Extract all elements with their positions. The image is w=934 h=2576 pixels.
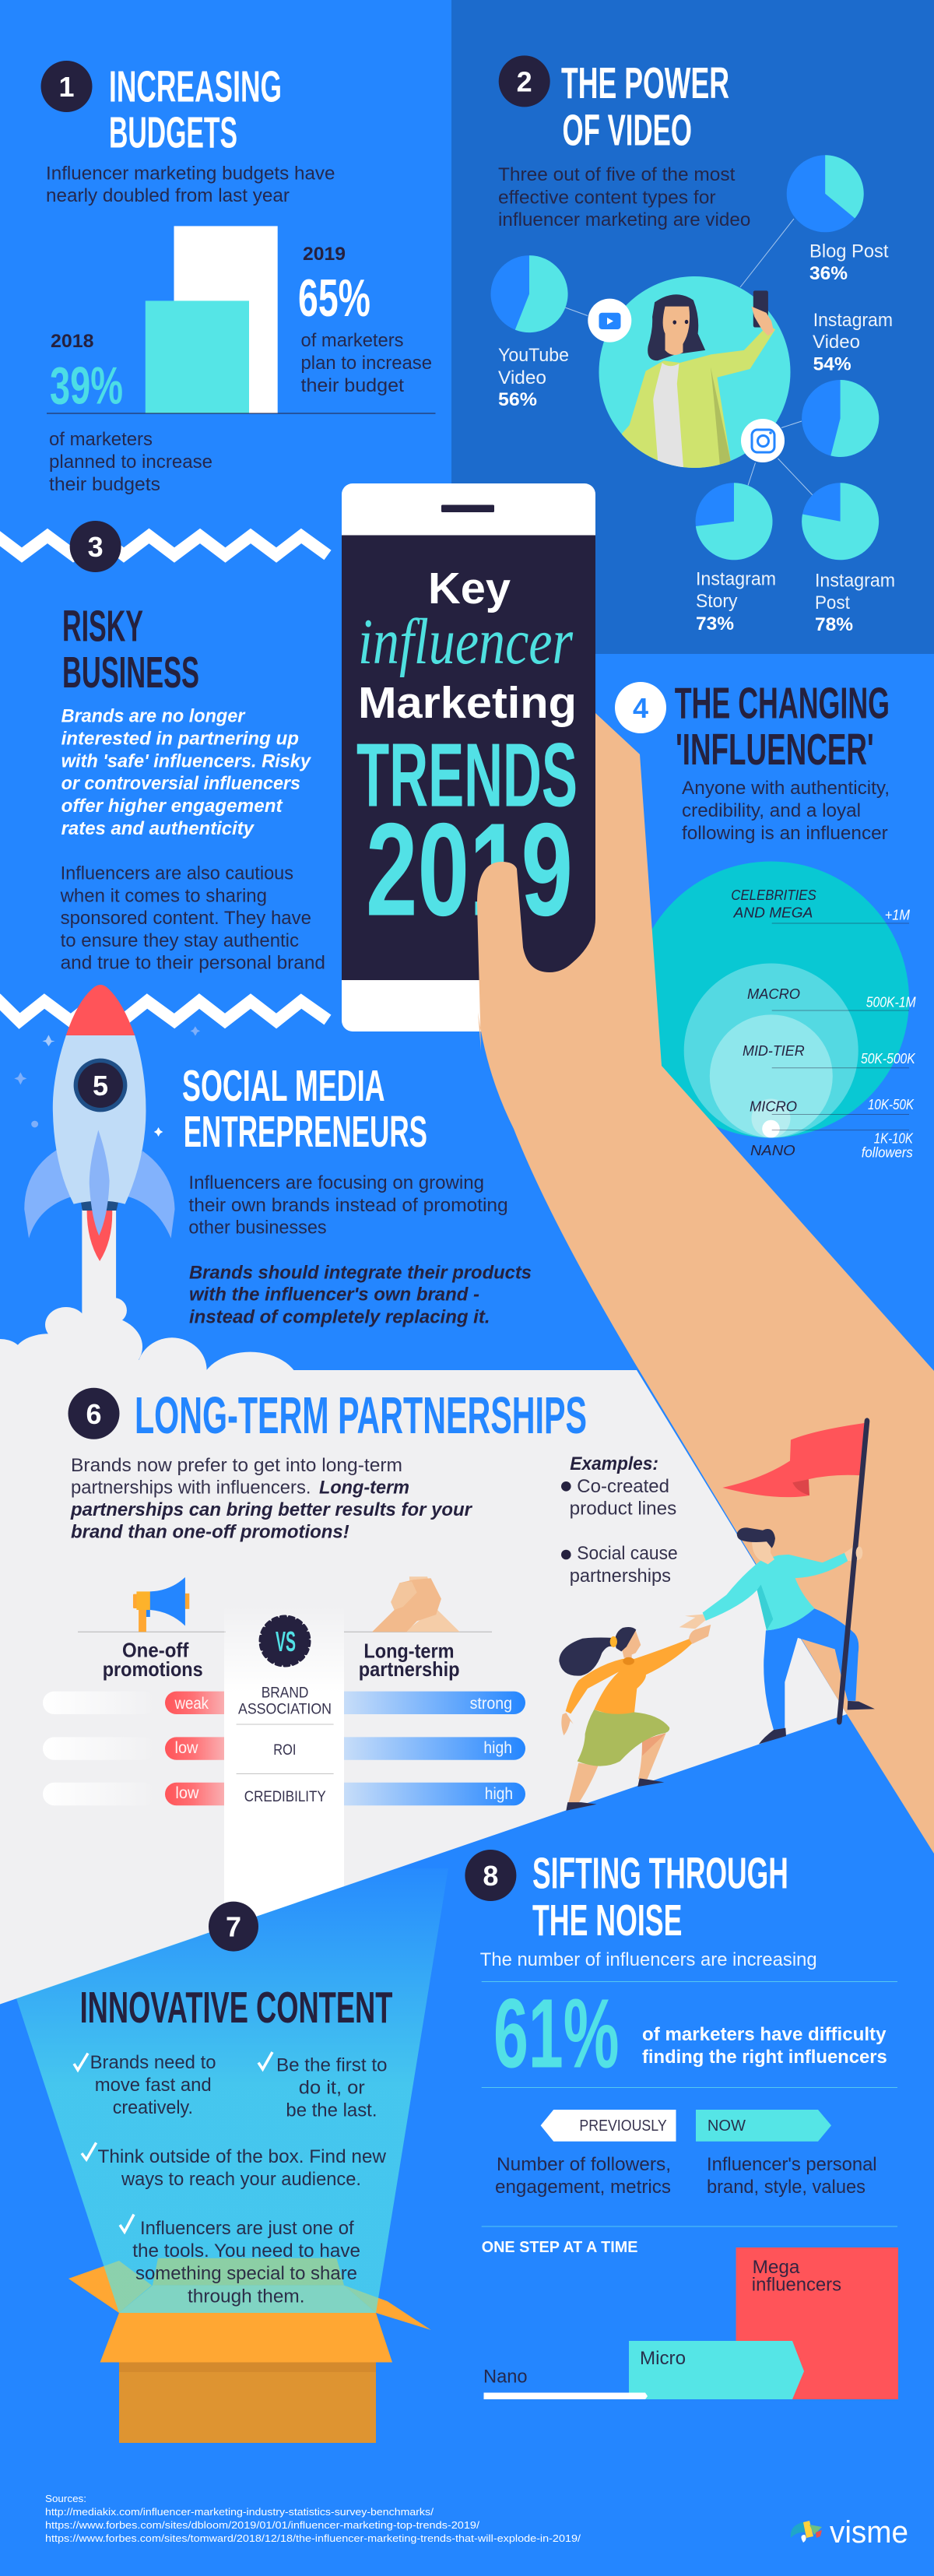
sources	[45, 2493, 581, 2544]
follower ranges: 500K-1M	[866, 995, 916, 1010]
intro text 4: credibility, and a loyal	[682, 800, 861, 821]
badge 7	[209, 1902, 258, 1952]
arrow: previously	[541, 2110, 676, 2142]
tip: be the first: be the last.	[286, 2100, 377, 2121]
intro text 8: The number of influencers are increasing	[480, 1949, 817, 1970]
illustration: climbers and flag	[559, 1422, 875, 1811]
panel: section 5 social media entrepreneurs	[74, 1059, 532, 1327]
intro text 2	[498, 164, 750, 230]
intro text 4	[682, 778, 890, 844]
stat 2019: 2019	[303, 244, 346, 265]
stat 61%: 61%	[493, 1979, 619, 2089]
panel: section 4 the changing influencer	[615, 679, 916, 1160]
arrow: now: NOW	[708, 2117, 746, 2135]
label: instagram story	[696, 568, 776, 634]
hand holding the phone	[477, 713, 934, 1857]
label: instagram post: 78%	[815, 614, 853, 635]
step chart: Mega	[753, 2257, 800, 2278]
box front	[100, 2313, 392, 2443]
body text 3	[60, 863, 325, 973]
text: current metrics	[707, 2154, 877, 2198]
tier names: CELEBRITIES	[731, 887, 816, 903]
intro text 2: influencer marketing are video	[498, 209, 750, 230]
panel: power of video dark background	[451, 0, 934, 654]
comparison bars left: weak	[174, 1695, 209, 1713]
heading 3	[62, 601, 199, 698]
column headings: One-off	[122, 1639, 189, 1662]
body text 5: Influencers are focusing on growing	[188, 1172, 484, 1193]
examples list: product lines	[570, 1498, 676, 1519]
tip: move fast: move fast and	[95, 2075, 212, 2096]
label: instagram video: Video	[813, 332, 860, 353]
tip: think outside the box	[98, 2146, 387, 2190]
badge 1	[40, 61, 92, 112]
pie: instagram story 73%	[696, 483, 773, 560]
stat 2019: plan to increase	[300, 353, 432, 374]
intro text 1: Influencer marketing budgets have	[46, 163, 335, 185]
step chart	[483, 2247, 898, 2399]
zigzag top	[0, 536, 328, 555]
badge 7: 7	[226, 1910, 241, 1943]
tip: be the first: Be the first to	[276, 2054, 388, 2075]
follower ranges: followers	[862, 1144, 913, 1160]
highlighted text 3: or controversial influencers	[61, 773, 300, 794]
step chart: influencers	[752, 2275, 841, 2296]
step chart: Nano	[483, 2366, 528, 2387]
pie: instagram post 78%	[802, 483, 879, 560]
sources: https://www.forbes.com/sites/dbloom/2019/01/01/influencer-marketing-top-trends-2019/	[45, 2519, 479, 2531]
tier leader lines	[772, 923, 909, 1130]
phone	[342, 483, 595, 1031]
body text 3: sponsored content. They have	[61, 908, 311, 929]
examples list: partnerships	[570, 1566, 671, 1587]
logo: visme: visme	[830, 2515, 908, 2550]
column headings: promotions	[103, 1657, 203, 1681]
badge 3	[70, 521, 121, 572]
panel: section 7 innovative content	[74, 1902, 393, 2307]
heading 3: RISKY	[62, 601, 143, 651]
centre column	[224, 1605, 344, 1928]
icon: flag	[722, 1423, 865, 1497]
badge 5	[74, 1059, 127, 1112]
step chart heading: ONE STEP AT A TIME	[482, 2239, 638, 2256]
title	[356, 564, 578, 944]
stat 2018: planned to increase	[49, 452, 212, 473]
body text 3: Influencers are also cautious	[61, 863, 293, 884]
badge 4	[615, 682, 666, 733]
highlighted text 3: offer higher engagement	[61, 796, 283, 817]
connector lines	[565, 219, 813, 495]
label: instagram post: Instagram	[815, 571, 895, 592]
highlighted text 3: Brands are no longer	[61, 706, 246, 727]
follower ranges: 1K-10K	[874, 1131, 914, 1147]
badge 6: 6	[86, 1398, 102, 1430]
title: Key	[428, 564, 511, 613]
stat 2019: their budget	[300, 375, 404, 396]
bar chart budgets	[47, 226, 436, 414]
comparison bars right	[327, 1692, 525, 1805]
heading 5	[182, 1061, 427, 1157]
heading 3: BUSINESS	[62, 648, 199, 698]
tip: influencers are tools: through them.	[188, 2286, 305, 2307]
intro text 6: partnerships can bring better results for your	[70, 1499, 473, 1520]
stat 2019	[298, 244, 432, 396]
sources: https://www.forbes.com/sites/tomward/2018/12/18/the-influencer-marketing-trends-that-will-explode-in-2019/	[45, 2532, 581, 2544]
title: TRENDS	[356, 724, 578, 825]
highlighted text 3: with 'safe' influencers. Risky	[61, 750, 312, 772]
examples list: Social cause	[577, 1543, 678, 1564]
text: previous metrics: Number of followers,	[497, 2154, 671, 2175]
highlighted text 5: with the influencer's own brand -	[189, 1284, 479, 1306]
light beam from the box	[16, 1868, 448, 2313]
badge 2: 2	[517, 65, 532, 98]
badge 8	[465, 1850, 516, 1901]
tier names: MID-TIER	[743, 1043, 805, 1059]
tip: be the first	[276, 2054, 388, 2121]
title: 2019	[366, 796, 573, 944]
heading 2: THE POWER	[561, 58, 729, 108]
zigzag bottom	[0, 998, 328, 1021]
label: instagram post: Post	[815, 592, 850, 613]
label: instagram video	[813, 310, 893, 375]
label: blog post: 36%	[809, 263, 848, 284]
icon: youtube badge	[588, 299, 631, 343]
heading 6: LONG-TERM PARTNERSHIPS	[135, 1386, 587, 1445]
tip: influencers are tools: something special to share	[135, 2263, 357, 2284]
comparison bars left	[43, 1692, 243, 1805]
criteria labels: ASSOCIATION	[238, 1702, 332, 1718]
panel: influencer tier circles	[633, 861, 909, 1138]
badge 2	[499, 55, 550, 107]
highlighted text 5: Brands should integrate their products	[189, 1262, 532, 1283]
panel: long-term partnerships grey background	[0, 1370, 934, 2024]
text: previous metrics	[495, 2154, 671, 2198]
icon: megaphone	[133, 1577, 189, 1632]
intro text 6: brand than one-off promotions!	[71, 1521, 349, 1543]
highlighted text 5	[189, 1262, 532, 1327]
body text 3: and true to their personal brand	[61, 952, 325, 973]
label: youtube video: Video	[498, 367, 546, 388]
intro text 6: Brands now prefer to get into long-term	[71, 1455, 402, 1476]
body text 5: other businesses	[188, 1217, 327, 1238]
heading 1: INCREASING	[109, 62, 282, 112]
badge 4: 4	[633, 692, 648, 724]
body text 5: their own brands instead of promoting	[188, 1195, 508, 1216]
intro text 2: Three out of five of the most	[498, 164, 736, 185]
tip: move fast	[90, 2052, 216, 2118]
comparison bars right: strong	[470, 1695, 512, 1713]
illustration: open box	[68, 2258, 431, 2330]
label: instagram video: 54%	[813, 354, 851, 375]
tip: influencers are tools: the tools. You need to have	[132, 2240, 360, 2261]
intro text 6: Long-term	[319, 1477, 409, 1498]
examples list	[561, 1453, 678, 1587]
man	[679, 1422, 875, 1744]
title: influencer	[358, 606, 573, 678]
body text 3: when it comes to sharing	[60, 886, 267, 907]
heading 1	[109, 62, 282, 157]
stat 2018: 39%	[50, 357, 123, 416]
heading 8	[532, 1848, 788, 1945]
label: instagram story: 73%	[696, 613, 734, 634]
label: youtube video	[498, 345, 569, 410]
panel: section 6 long-term partnerships	[43, 1386, 678, 1928]
highlighted text 3: interested in partnering up	[61, 729, 299, 749]
icon: vs seal	[260, 1616, 310, 1666]
illustration: woman taking a selfie	[599, 276, 791, 468]
label: instagram post	[815, 571, 895, 635]
stat 2018: their budgets	[49, 474, 160, 495]
tier names: MACRO	[747, 986, 800, 1002]
intro text 1	[46, 163, 335, 206]
label: blog post	[809, 241, 889, 284]
highlighted text 3: rates and authenticity	[61, 818, 255, 839]
stat 61%	[493, 1979, 887, 2089]
tip: move fast: creatively.	[113, 2097, 193, 2118]
examples list: Examples:	[570, 1453, 658, 1474]
stat 2019: 65%	[298, 269, 370, 328]
label: blog post: Blog Post	[809, 241, 889, 262]
intro text 1: nearly doubled from last year	[46, 185, 290, 206]
label: instagram story: Instagram	[696, 568, 776, 590]
heading 8: SIFTING THROUGH	[532, 1848, 788, 1898]
icon: clasped hands	[372, 1576, 460, 1632]
text: current metrics: Influencer's personal	[707, 2154, 877, 2175]
badge 1: 1	[58, 71, 75, 103]
pie: instagram video 54%	[802, 380, 879, 457]
highlighted text 5: instead of completely replacing it.	[189, 1306, 490, 1327]
heading 4	[675, 679, 890, 775]
label: instagram story: Story	[696, 591, 738, 612]
tip: move fast: Brands need to	[90, 2052, 216, 2073]
intro text 4: Anyone with authenticity,	[682, 778, 890, 799]
tier names: MICRO	[750, 1099, 797, 1115]
follower ranges: 50K-500K	[861, 1051, 916, 1067]
tip: think outside the box: Think outside of the box. Find new	[98, 2146, 387, 2167]
blue lower background	[0, 1714, 934, 2576]
heading 2: OF VIDEO	[562, 105, 692, 155]
intro text 2: effective content types for	[498, 187, 716, 208]
icon: instagram badge	[741, 419, 785, 462]
tier names: AND MEGA	[733, 905, 813, 920]
heading 5: SOCIAL MEDIA	[182, 1061, 385, 1111]
tier names	[731, 887, 816, 1158]
tip: think outside the box: ways to reach your audience.	[121, 2169, 361, 2190]
pie: youtube video 56%	[490, 255, 568, 332]
intro text 6: partnerships with influencers.	[71, 1477, 311, 1498]
stat 2018: of marketers	[49, 429, 153, 450]
pie: blog post 36%	[787, 155, 864, 232]
logo: visme	[791, 2515, 908, 2550]
badge 6	[68, 1388, 120, 1439]
label: instagram video: Instagram	[813, 310, 893, 331]
badge 5: 5	[93, 1070, 108, 1102]
comparison bars left: low	[175, 1784, 199, 1802]
stat 2018	[49, 331, 212, 495]
sources: Sources:	[45, 2493, 86, 2504]
arrow: previously: PREVIOUSLY	[579, 2117, 667, 2135]
body text 5	[188, 1172, 508, 1238]
criteria labels: ROI	[273, 1742, 296, 1759]
criteria labels	[237, 1685, 334, 1805]
tip: influencers are tools: Influencers are just one of	[140, 2218, 354, 2239]
sources: http://mediakix.com/influencer-marketing-industry-statistics-survey-benchmarks/	[45, 2506, 434, 2518]
step chart: Micro	[640, 2348, 686, 2369]
panel: section 8 sifting through the noise	[465, 1848, 898, 2399]
text: current metrics: brand, style, values	[707, 2177, 866, 2198]
heading 5: ENTREPRENEURS	[184, 1107, 427, 1157]
dividers	[482, 1981, 897, 2226]
tip: be the first: do it, or	[299, 2077, 365, 2098]
column headings: partnership	[359, 1657, 460, 1681]
intro text 6	[70, 1455, 473, 1543]
panel: section 3 risky business	[0, 521, 328, 1021]
panel: section 1 increasing budgets	[40, 61, 436, 495]
arrow: now	[696, 2110, 831, 2142]
tier names: NANO	[750, 1143, 795, 1158]
illustration: rocket with smoke	[0, 985, 300, 1425]
icon: vs seal: VS	[276, 1625, 296, 1657]
criteria labels: CREDIBILITY	[244, 1789, 326, 1805]
tip: influencers are tools	[132, 2218, 360, 2307]
follower ranges: 10K-50K	[868, 1097, 915, 1112]
stat 61%: finding the right influencers	[642, 2047, 887, 2068]
stat 2019: of marketers	[300, 330, 403, 351]
examples list: Co-created	[577, 1476, 669, 1497]
text: previous metrics: engagement, metrics	[495, 2177, 671, 2198]
badge 3: 3	[88, 531, 104, 563]
column headings	[103, 1639, 460, 1681]
check marks	[74, 2052, 272, 2232]
heading 1: BUDGETS	[109, 107, 237, 157]
column headings: Long-term	[363, 1639, 455, 1662]
badge 8: 8	[483, 1860, 498, 1892]
follower ranges: +1M	[885, 908, 910, 923]
panel: section 2 power of video	[490, 55, 895, 635]
stat 2018: 2018	[51, 331, 93, 352]
heading 8: THE NOISE	[532, 1896, 682, 1945]
criteria labels: BRAND	[262, 1685, 308, 1701]
comparison bars right: high	[485, 1785, 513, 1803]
intro text 4: following is an influencer	[682, 823, 888, 844]
title: Marketing	[358, 678, 577, 728]
comparison bars left: low	[174, 1739, 198, 1757]
heading 7: INNOVATIVE CONTENT	[80, 1983, 393, 2033]
follower ranges	[861, 908, 916, 1160]
label: youtube video: 56%	[498, 389, 537, 410]
highlighted text 3	[61, 706, 312, 839]
stat 61%: of marketers have difficulty	[642, 2024, 887, 2045]
heading 2	[561, 58, 729, 155]
comparison bars right: high	[483, 1739, 512, 1757]
label: youtube video: YouTube	[498, 345, 569, 366]
body text 3: to ensure they stay authentic	[61, 930, 299, 951]
woman	[559, 1625, 711, 1811]
